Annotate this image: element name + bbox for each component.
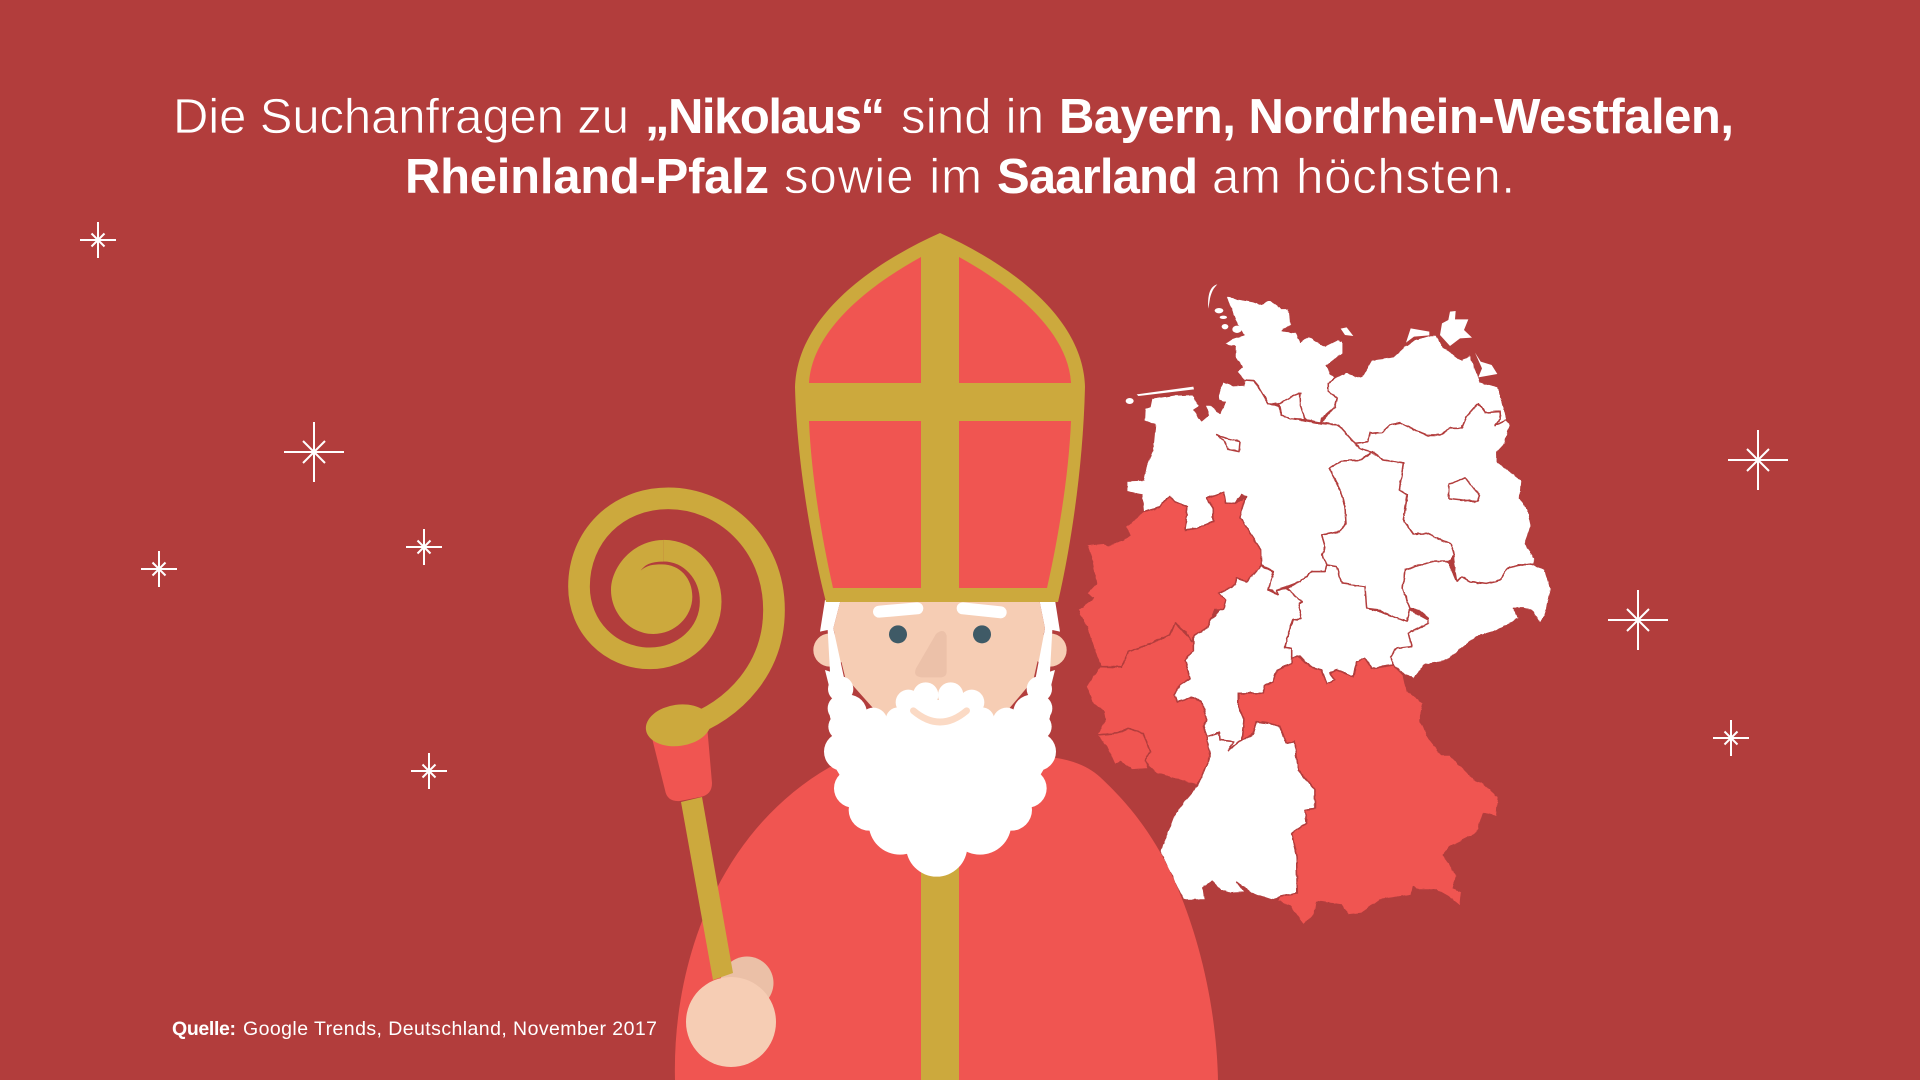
nose [915,631,947,677]
ears [813,633,1067,667]
title line 1: „Nikolaus“ [645,90,885,144]
eyebrows [879,608,1001,612]
state: Sachsen-Anhalt [1322,452,1454,622]
title line 1: Die Suchanfragen zu [173,90,629,144]
title line 1: Bayern, Nordrhein-Westfalen, [1059,90,1734,144]
crozier red socket [650,725,712,801]
mitre panel top left [809,257,921,383]
crozier staff [681,797,733,980]
title [173,90,1734,204]
state: Hessen [1174,565,1302,750]
mitre panel top right [959,257,1071,383]
hand back [720,956,774,1010]
source: Quelle: [172,1018,236,1040]
mitre gold [795,233,1085,602]
head [813,600,1067,877]
map: Germany [1077,284,1551,925]
robe gold band [921,860,959,1080]
beard [824,676,1056,877]
state: Saarland [1097,728,1150,769]
state: Rheinland-Pfalz [1086,623,1210,785]
robe [675,757,1218,1080]
state: Berlin [1448,477,1480,502]
state: Nordrhein-Westfalen [1077,492,1262,667]
title line 1: sind in [901,90,1044,144]
title line 2: am höchsten. [1212,150,1515,204]
eyes [889,625,991,643]
state: Bremen [1217,435,1240,452]
mitre panel bottom right [959,421,1071,588]
title line 2 [405,150,1515,204]
state: Mecklenburg-Vorpommern [1321,335,1507,443]
stars [80,222,1788,789]
state: Baden-Württemberg [1160,722,1315,900]
title line 2: Saarland [997,150,1198,204]
source: Google Trends, Deutschland, November 2017 [243,1018,657,1040]
mitre [795,233,1085,602]
title line 2: Rheinland-Pfalz [405,150,769,204]
state: Brandenburg [1355,403,1535,583]
states drawn in lower frame [1086,565,1498,925]
crozier spiral [579,498,774,750]
state: Bayern [1238,656,1498,925]
state: Sachsen [1390,562,1551,679]
mitre panel bottom left [809,421,921,588]
mustache [896,682,984,720]
hair [820,600,1060,690]
state: Niedersachsen [1127,380,1372,594]
title line 1 [173,90,1734,144]
face [833,600,1045,723]
title line 2: sowie im [784,150,982,204]
state: Hamburg [1278,393,1305,419]
state: Schleswig-Holstein [1223,297,1343,423]
hand [686,977,776,1067]
state: Thüringen [1285,565,1428,683]
mouth [913,711,967,722]
islands [1126,284,1497,404]
crozier [579,498,774,801]
